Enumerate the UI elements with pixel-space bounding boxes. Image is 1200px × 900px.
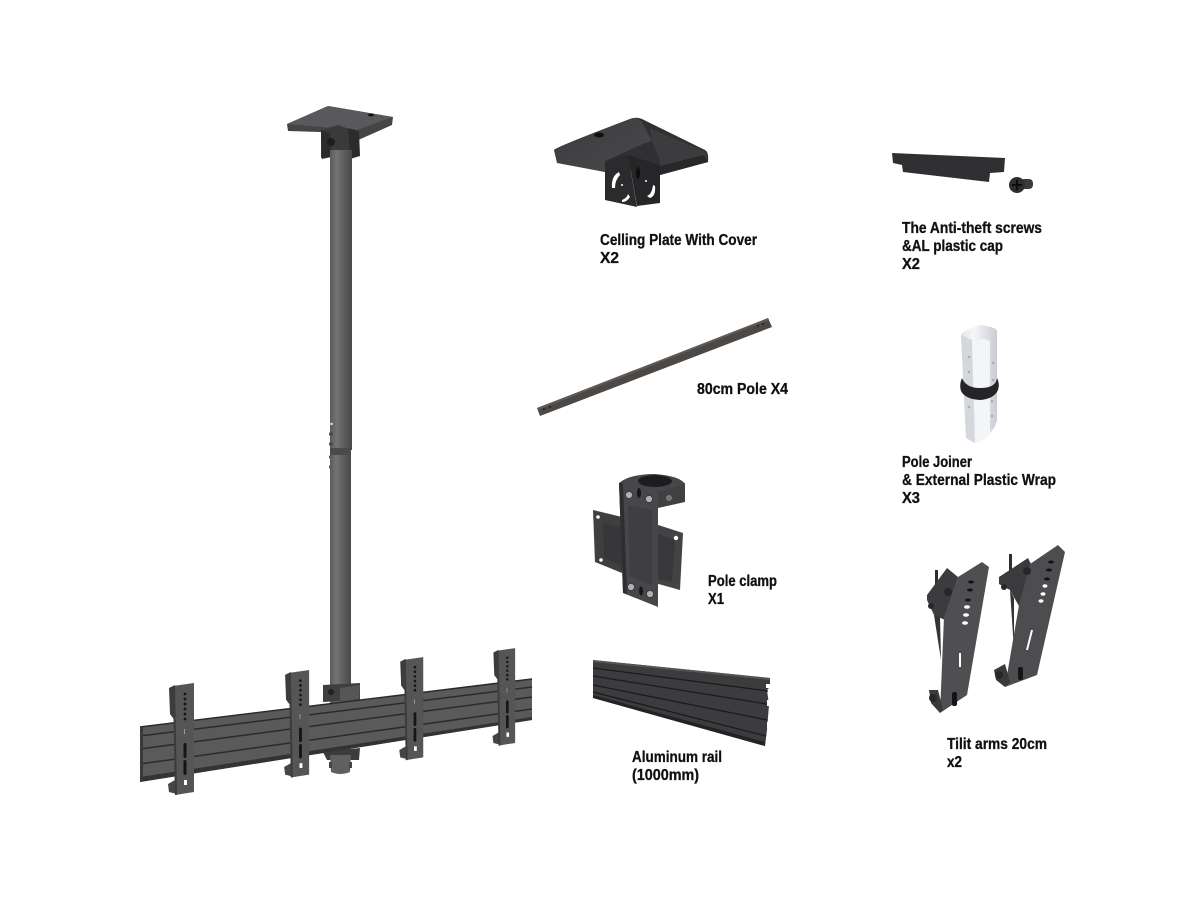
mounting bracket 4 bbox=[493, 648, 515, 746]
plastic cap bbox=[892, 153, 1005, 182]
label: pole clamp: X1 bbox=[708, 591, 724, 608]
part: tilt arm left bbox=[927, 562, 989, 713]
label: ceiling plate bbox=[600, 232, 757, 267]
upper pole bbox=[330, 150, 352, 450]
plastic wrap band bbox=[960, 378, 999, 400]
label: pole clamp bbox=[708, 573, 777, 608]
label: ceiling plate: X2 bbox=[600, 250, 619, 267]
part: aluminum rail bbox=[593, 660, 771, 746]
label: ceiling plate: Celling Plate With Cover bbox=[600, 232, 757, 249]
label: aluminum rail bbox=[632, 749, 722, 784]
main assembly: ceiling mount with pole and rail bbox=[140, 106, 532, 795]
label: anti-theft screws: &AL plastic cap bbox=[902, 238, 1003, 255]
bracket plates bbox=[605, 155, 660, 207]
label: anti-theft screws: X2 bbox=[902, 256, 920, 273]
label: tilt arms bbox=[947, 736, 1047, 771]
pole clamp on main assembly bbox=[323, 683, 360, 774]
mounting bracket 1 bbox=[168, 683, 194, 795]
mounting bracket 2 bbox=[284, 670, 309, 778]
label: aluminum rail: Aluminum rail bbox=[632, 749, 722, 766]
screw bbox=[1009, 177, 1033, 193]
part: anti-theft screw and plastic cap bbox=[892, 153, 1033, 193]
label: tilt arms: x2 bbox=[947, 754, 962, 771]
part: pole joiner with plastic wrap bbox=[960, 325, 999, 443]
label: anti-theft screws: The Anti-theft screws bbox=[902, 220, 1042, 237]
label: pole joiner: & External Plastic Wrap bbox=[902, 472, 1056, 489]
label: pole joiner bbox=[902, 454, 1056, 507]
label: aluminum rail: (1000mm) bbox=[632, 767, 699, 784]
label: pole clamp: Pole clamp bbox=[708, 573, 777, 590]
label: pole joiner: Pole Joiner bbox=[902, 454, 972, 471]
label: anti-theft screws bbox=[902, 220, 1042, 273]
part: 80cm pole bbox=[537, 318, 772, 416]
part: ceiling plate with cover bbox=[554, 118, 708, 207]
ceiling plate on main assembly bbox=[287, 106, 393, 159]
pole joint bbox=[329, 423, 351, 478]
aluminum rail on main assembly bbox=[140, 679, 532, 782]
label: pole joiner: X3 bbox=[902, 490, 920, 507]
mounting bracket 3 bbox=[399, 657, 423, 760]
lower pole bbox=[330, 455, 351, 755]
label: tilt arms: Tilit arms 20cm bbox=[947, 736, 1047, 753]
part: tilt arm right bbox=[994, 545, 1065, 687]
part: pole clamp bbox=[593, 474, 685, 607]
label: 80cm pole: 80cm Pole X4 bbox=[697, 381, 788, 398]
